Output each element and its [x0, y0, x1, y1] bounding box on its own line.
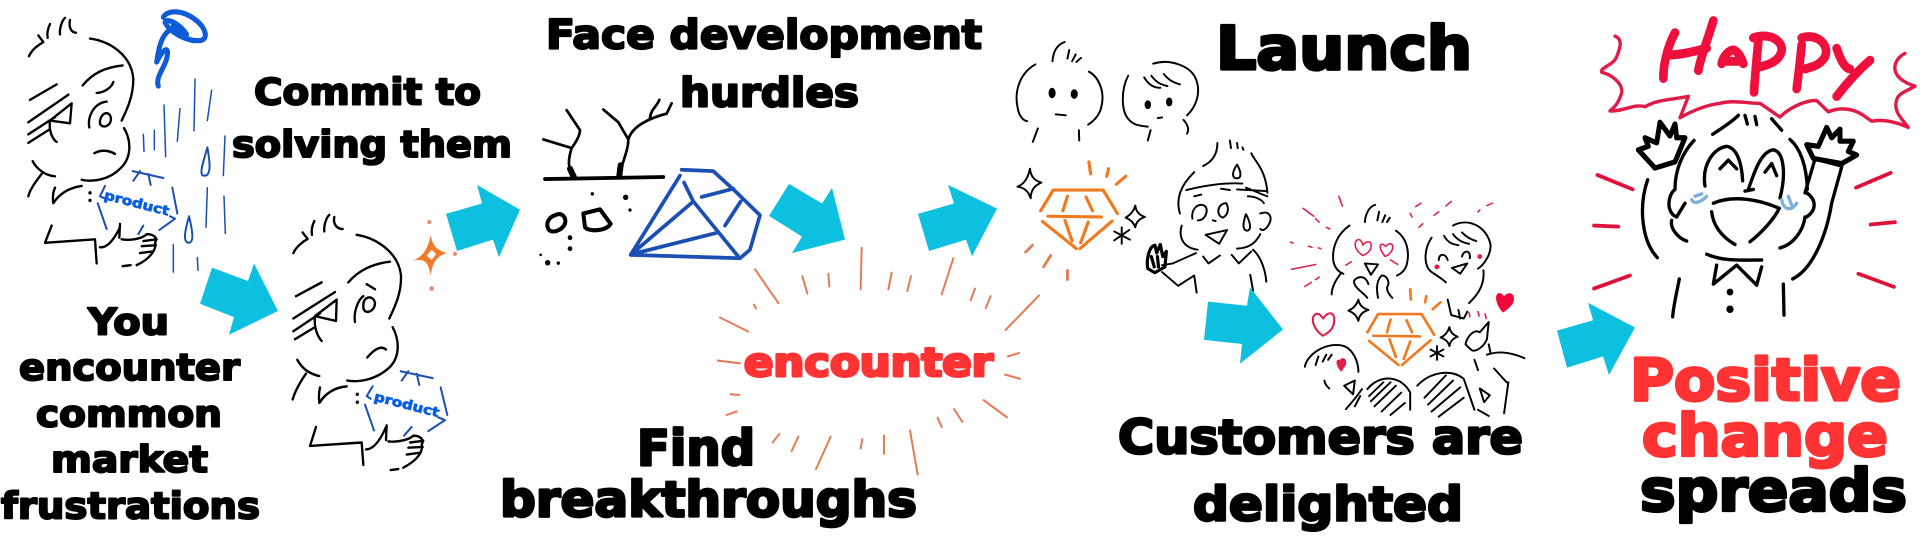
text: Commit to solving them: [232, 72, 512, 166]
text: Find breakthroughs: Find: [637, 421, 755, 477]
icon: blue scribble of frustration: [157, 12, 205, 86]
arrow: launch to customers: [1204, 287, 1283, 364]
icon: joyful person with raised hands: [1638, 115, 1857, 317]
icon: two curious onlookers: [1017, 42, 1198, 142]
arrow: customers to positive change: [1557, 303, 1635, 375]
text: You encounter common market frustrations: encounter: [19, 348, 240, 389]
text: Launch: Launch: [1216, 13, 1472, 83]
text: Face development hurdles: [546, 12, 982, 117]
text: Face development hurdles: hurdles: [680, 70, 859, 117]
text: You encounter common market frustrations: common: [36, 394, 222, 436]
icon: red HAPPY lettering in frame: [1602, 21, 1915, 127]
icon: heart-eyed customer: [1332, 205, 1408, 321]
text: Customers are delighted: Customers are: [1118, 411, 1523, 466]
text: Customers are delighted: delighted: [1193, 478, 1463, 533]
icon: frustrated person holding product: product: [102, 188, 171, 220]
icon: rough blue gem: [631, 170, 760, 258]
icon: determined person holding product: product: [372, 390, 441, 421]
icon: hearts and red sparks: [1291, 196, 1514, 372]
text: Positive change spreads: Positive: [1630, 347, 1901, 414]
text: Positive change spreads: change: [1642, 403, 1888, 470]
icon: barren trees and rocks over ground: [539, 100, 672, 266]
icon: crowd in front of gem: [1305, 322, 1524, 417]
icon: polished orange gem with sparkles: [1017, 162, 1145, 280]
text: Positive change spreads: [1630, 347, 1907, 525]
text: Commit to solving them: Commit to: [254, 72, 481, 113]
icon: determined person holding product: [293, 215, 447, 470]
text: Customers are delighted: [1118, 411, 1523, 533]
text: Commit to solving them: solving them: [232, 125, 512, 166]
arrow: breakthrough to launch: [918, 185, 997, 256]
text: You encounter common market frustrations: frustrations: [1, 486, 260, 528]
text: You encounter common market frustrations: market: [51, 440, 208, 481]
text: Face development hurdles: Face development: [546, 12, 982, 59]
text: Find breakthroughs: breakthroughs: [500, 473, 917, 529]
text: encounter callout: encounter: [744, 340, 993, 386]
icon: falling lines and sweat drops: [143, 79, 225, 272]
arrow: step one to two: [200, 263, 278, 335]
icon: smiling customer: [1426, 222, 1491, 319]
icon: orange gem among customers: [1367, 289, 1441, 365]
text: Positive change spreads: spreads: [1640, 458, 1907, 525]
arrow: step two to three: [446, 185, 520, 257]
icon: frustrated person holding product: [28, 18, 177, 266]
icon: excited founder waving: [1147, 140, 1271, 293]
icon: red joy dashes: [1594, 173, 1895, 289]
icon: delighted customers around gem: [1291, 196, 1524, 417]
arrow: step three to breakthrough: [769, 184, 845, 253]
text: Find breakthroughs: [500, 421, 917, 529]
text: You encounter common market frustrations: [1, 302, 260, 528]
text: You encounter common market frustrations: You: [87, 302, 169, 344]
icon: orange sparkle: [413, 220, 457, 291]
icon: orange burst around encounter: [718, 248, 1039, 475]
